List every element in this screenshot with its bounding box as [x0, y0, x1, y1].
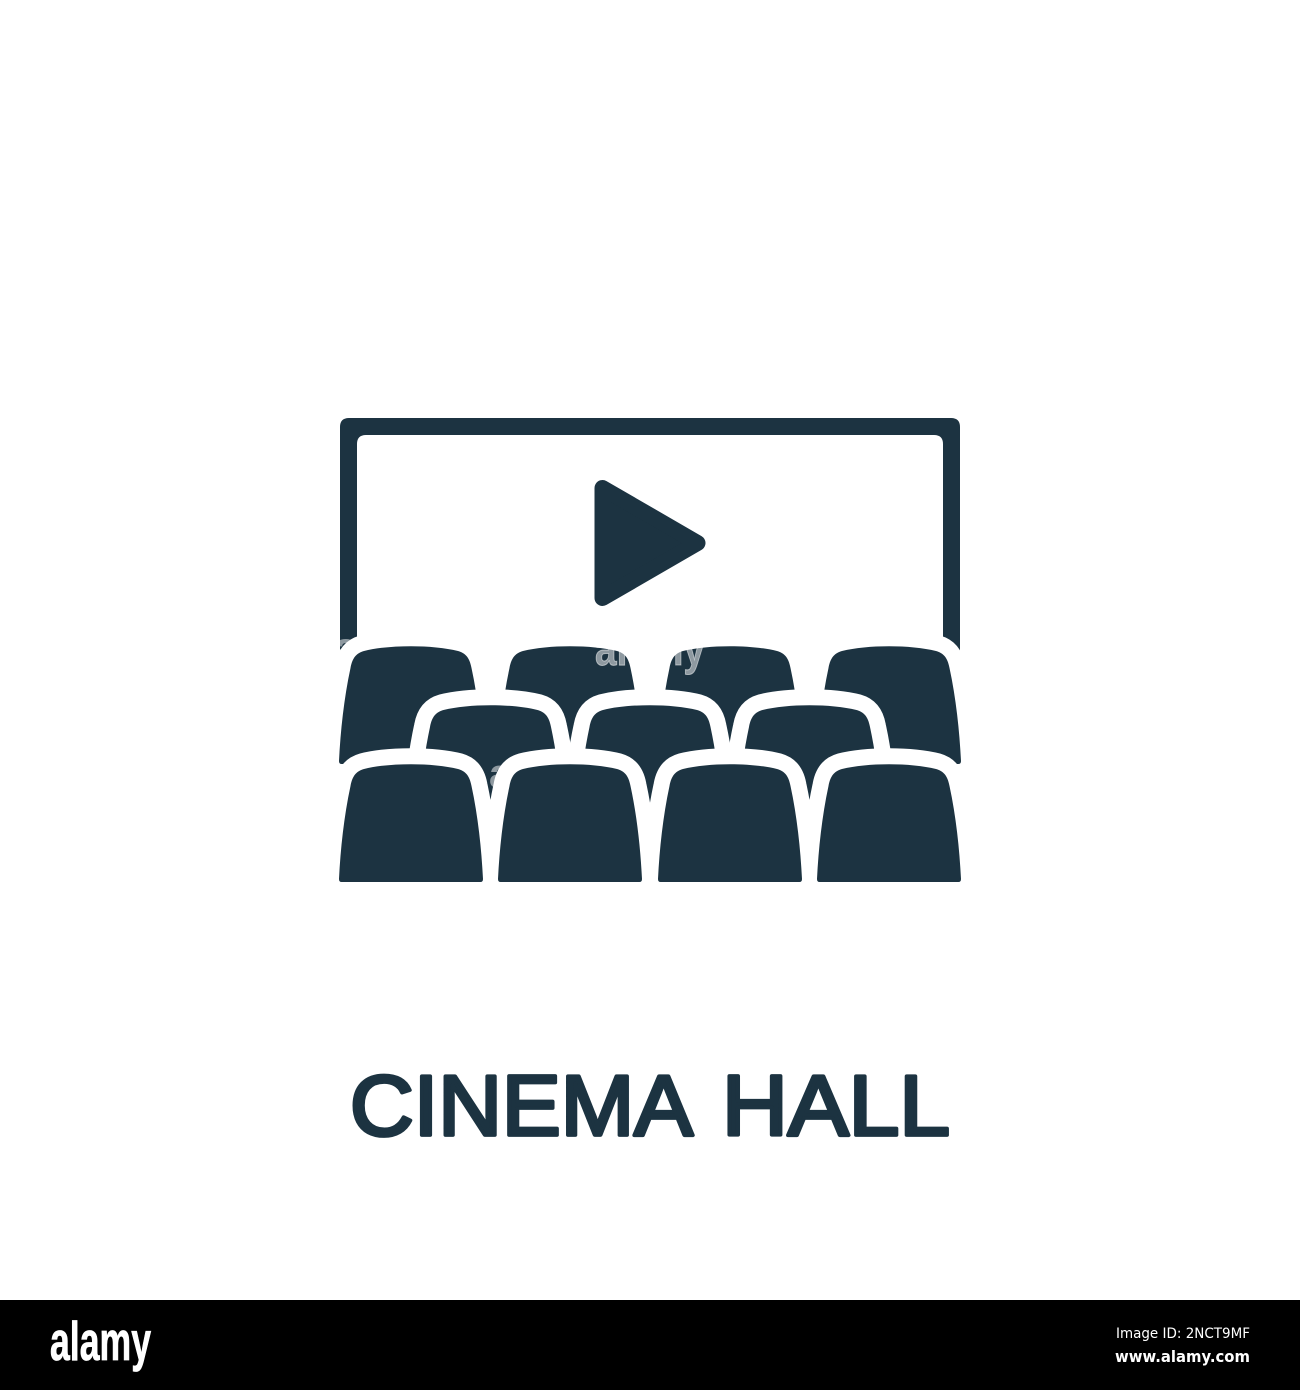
icon: cinema hall — [333, 418, 961, 882]
icon: play triangle — [602, 488, 698, 598]
footer logo: alamy — [50, 1310, 151, 1372]
title: CINEMA — [350, 1059, 693, 1154]
back row of seats — [339, 646, 961, 764]
image id: Image ID: 2NCT9MF — [1116, 1326, 1250, 1342]
icon: cinema screen frame — [340, 418, 960, 700]
title: HALL — [722, 1059, 950, 1154]
footer bar — [0, 1300, 1300, 1390]
watermark fragment on screen frame: a — [333, 622, 359, 674]
watermark fragment on middle row: a — [489, 752, 512, 796]
front row of seats — [339, 764, 961, 882]
title — [350, 1059, 950, 1154]
watermark fragment on back row: alamy — [595, 623, 705, 675]
middle row of seats — [418, 705, 882, 823]
website url: www.alamy.com — [1115, 1347, 1250, 1366]
